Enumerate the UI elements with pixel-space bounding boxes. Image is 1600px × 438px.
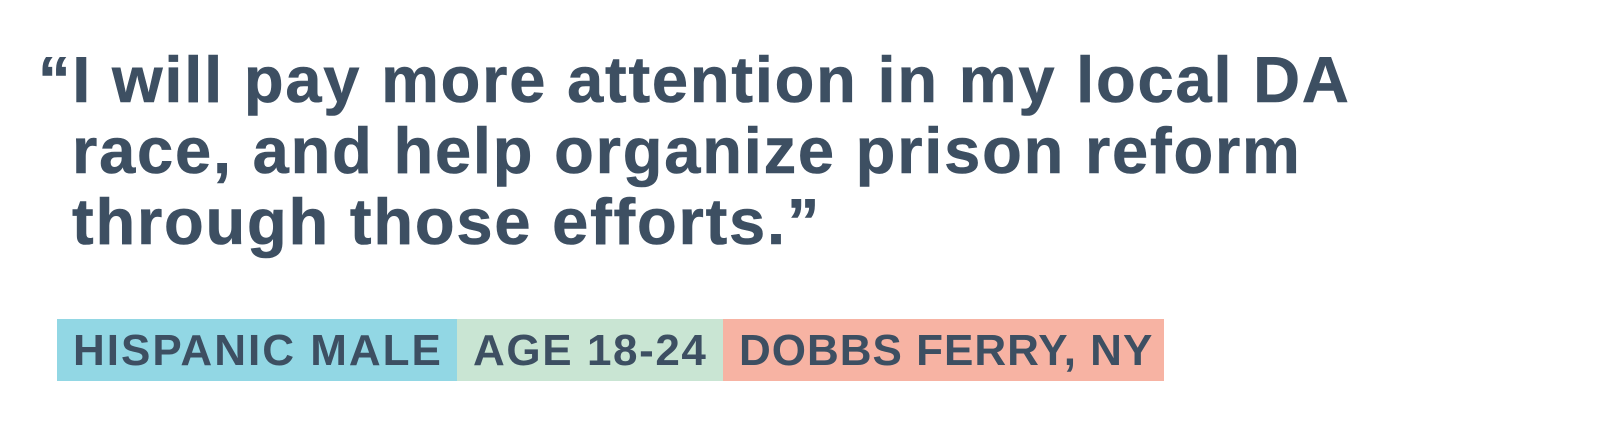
quote: “I will pay more attention in my local DA: [38, 43, 1351, 116]
tag: age: [457, 319, 723, 381]
tag: age: AGE 18-24: [473, 326, 708, 375]
tags: [57, 319, 1164, 381]
tag: demographic: HISPANIC MALE: [73, 326, 443, 375]
quote: race, and help organize prison reform: [72, 114, 1302, 187]
quote: [38, 43, 1351, 258]
tag: location: DOBBS FERRY, NY: [739, 326, 1153, 375]
quote: through those efforts.”: [72, 185, 821, 258]
